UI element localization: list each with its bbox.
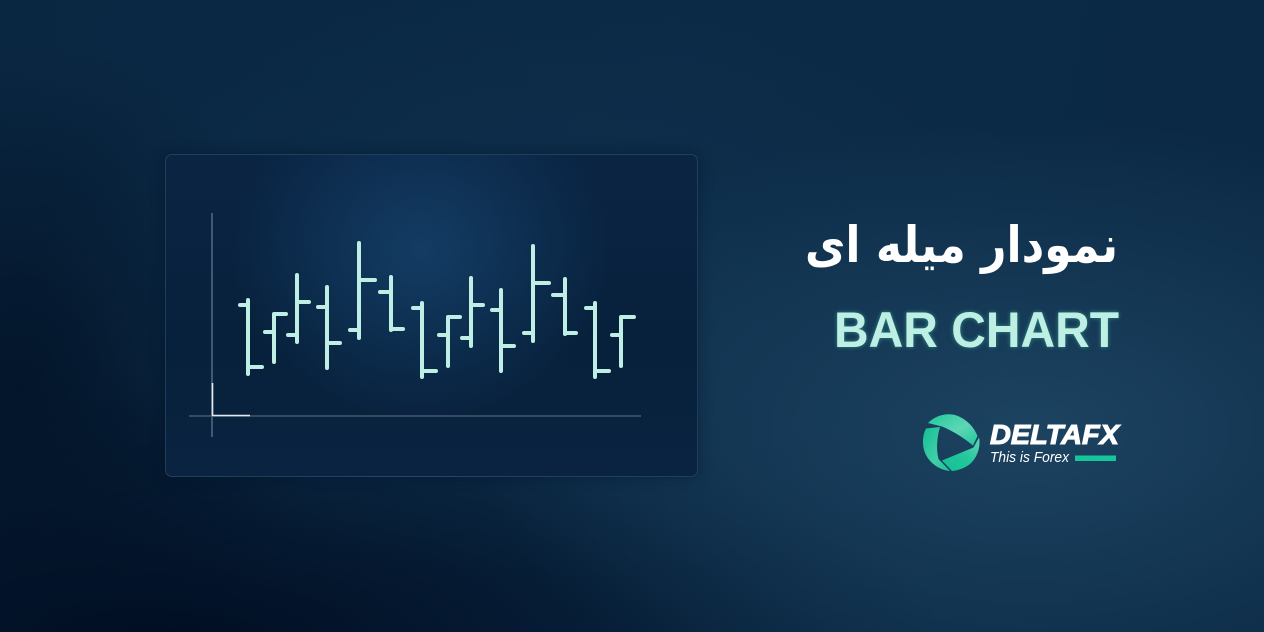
chart axes xyxy=(189,213,641,437)
heading: Persian title: نمودار میله ای xyxy=(805,216,1118,275)
icon: logo triangle blades xyxy=(923,414,980,471)
logo: DeltaFX xyxy=(923,414,1121,471)
panel: chart card xyxy=(165,154,698,477)
logo accent bar xyxy=(1075,456,1116,461)
bar chart: OHLC bars xyxy=(240,243,634,377)
heading: English title: BAR CHART xyxy=(834,302,1119,358)
logo wordmark: DELTAFX xyxy=(990,419,1121,450)
logo tagline: This is Forex xyxy=(990,450,1070,466)
